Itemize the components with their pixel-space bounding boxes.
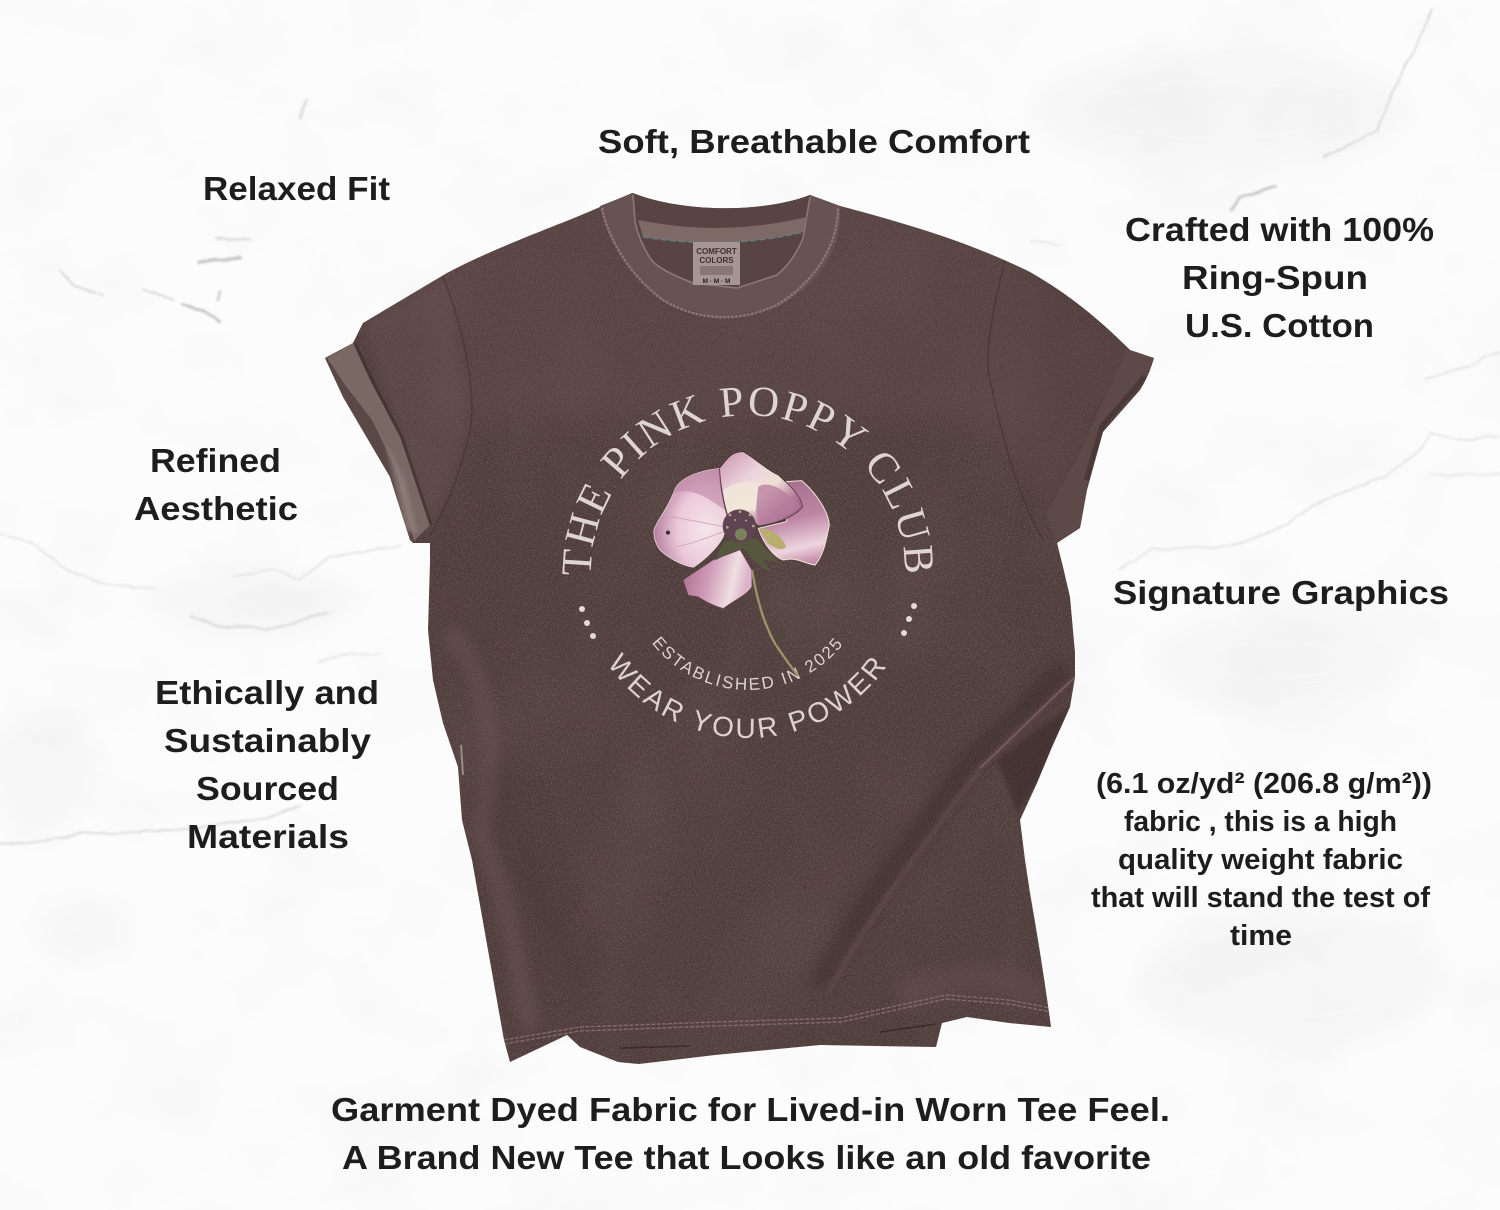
left rolled cuff underside [325, 358, 413, 543]
left petal [654, 468, 728, 567]
shirt body and sleeves [325, 193, 1154, 1064]
hem stitches [504, 999, 1051, 1044]
label: Soft, Breathable Comfort: Soft, Breathable Comfort [598, 123, 1030, 160]
stamens [723, 509, 756, 543]
label: fabric weight: fabric , this is a high [1124, 806, 1397, 838]
top petal [719, 452, 803, 526]
collar [600, 193, 840, 318]
left rolled cuff [327, 343, 430, 541]
label: Refined Aesthetic: Refined [150, 442, 281, 479]
bottom petal [683, 550, 752, 608]
flower stem [752, 570, 798, 676]
neck tag: COLORS [699, 256, 734, 265]
left side folds [450, 630, 530, 1030]
right rolled cuff [1047, 350, 1154, 543]
neck opening pale edge [633, 195, 810, 288]
yellow patch [759, 528, 786, 549]
label: fabric weight: time [1230, 920, 1292, 952]
curved text: tagline: WEAR YOUR POWER [610, 652, 886, 738]
label: fabric weight: that will stand the test of [1091, 882, 1430, 914]
label: garment dyed fabric: A Brand New Tee that Looks like an old favorite [342, 1139, 1151, 1176]
stem leaf [776, 630, 788, 645]
label: garment dyed fabric: Garment Dyed Fabric for Lived-in Worn Tee Feel. [331, 1091, 1170, 1128]
pressed poppy flower [654, 452, 829, 608]
label: fabric weight: quality weight fabric [1118, 844, 1403, 876]
label: Relaxed Fit: Relaxed Fit [203, 170, 390, 207]
label: garment dyed fabric [331, 1091, 1170, 1176]
label: Crafted with 100% Ring-Spun U.S. Cotton [1125, 211, 1434, 344]
left cuff shadow [355, 343, 431, 525]
sleeve seams [430, 277, 472, 535]
neck tag [693, 242, 740, 285]
marble veins [0, 8, 1500, 843]
fabric texture, folds and cuffs [320, 185, 1160, 1070]
label: fabric weight: (6.1 oz/yd² (206.8 g/m²)) [1096, 768, 1432, 800]
label: Ethically and Sustainably Sourced Materials: Sustainably [164, 722, 372, 759]
flower centre [735, 528, 747, 540]
inside of neck [633, 193, 810, 288]
neck tag: M · M · M [703, 278, 730, 285]
label: Refined Aesthetic: Aesthetic [134, 490, 298, 527]
label: Crafted with 100% Ring-Spun U.S. Cotton: U.S. Cotton [1185, 307, 1374, 344]
decorative dots right [901, 603, 917, 636]
t-shirt [320, 185, 1160, 1070]
label: Refined Aesthetic [134, 442, 298, 527]
curved text: established: ESTABLISHED IN 2025 [652, 636, 842, 690]
label: Ethically and Sustainably Sourced Materials: Ethically and [155, 674, 379, 711]
label: Ethically and Sustainably Sourced Materials: Sourced [196, 770, 339, 807]
label: Crafted with 100% Ring-Spun U.S. Cotton: Crafted with 100% [1125, 211, 1434, 248]
graphic: The Pink Poppy Club logo [562, 388, 933, 738]
label: Crafted with 100% Ring-Spun U.S. Cotton: Ring-Spun [1182, 259, 1368, 296]
label: Ethically and Sustainably Sourced Materials: Materials [187, 818, 349, 855]
decorative dots left [579, 606, 596, 639]
sepals [715, 538, 778, 575]
diagonal fold shading [818, 669, 1065, 985]
back neck band [638, 217, 807, 243]
right petal [758, 481, 829, 565]
back neck stitching [643, 232, 803, 243]
label: Signature Graphics: Signature Graphics [1113, 574, 1449, 611]
label: fabric weight [1091, 768, 1432, 952]
label: Ethically and Sustainably Sourced Materials [155, 674, 379, 855]
curved text: brand name: THE PINK POPPY CLUB [562, 388, 933, 574]
collar stitching [602, 208, 838, 317]
neck tag: COMFORT [696, 247, 737, 256]
right cuff shadow [1086, 376, 1145, 480]
